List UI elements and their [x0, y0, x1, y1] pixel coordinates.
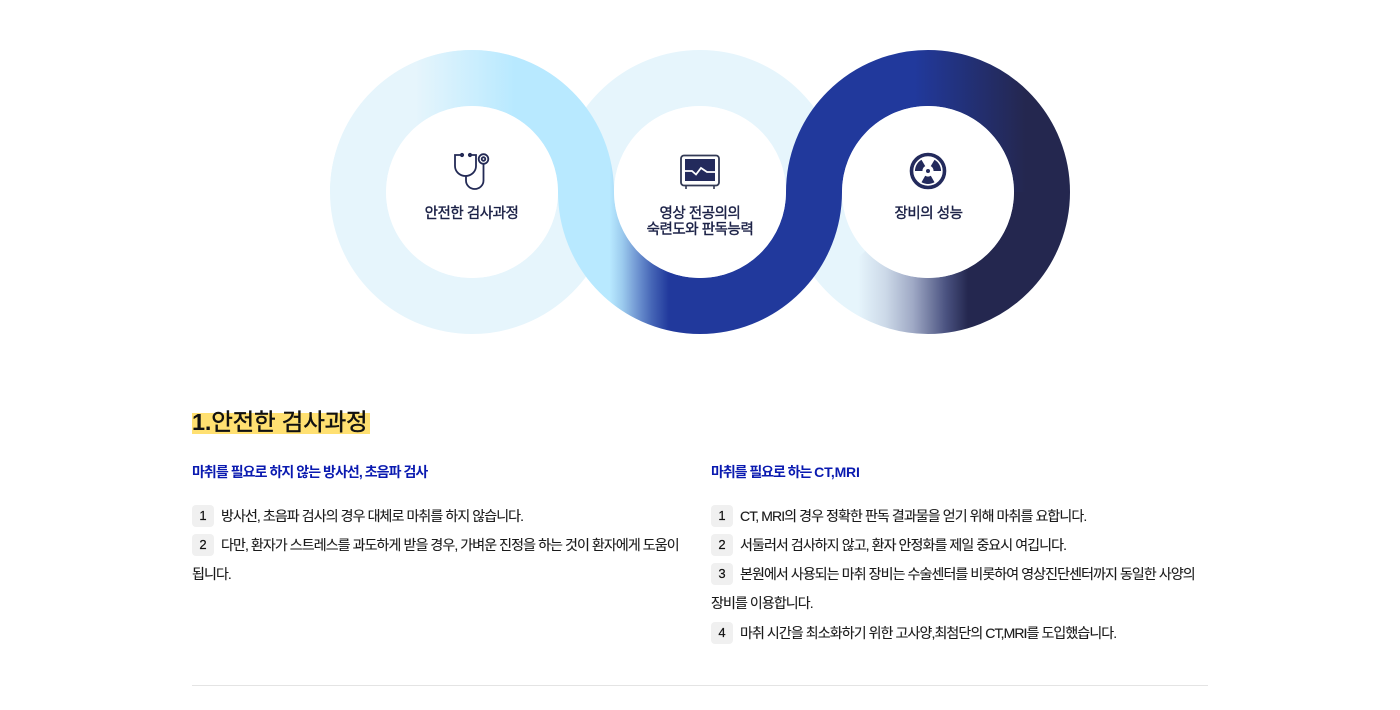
pale base rings [358, 78, 1042, 306]
ring labels: 숙련도와 판독능력 [647, 221, 753, 238]
badge 1 [192, 505, 214, 527]
badge 2: 2 [199, 537, 207, 552]
item 4: 마취 시간을 최소화하기 위한 고사양,최첨단의 CT,MRI를 도입했습니다. [740, 625, 1116, 641]
item 2: 다만, 환자가 스트레스를 과도하게 받을 경우, 가벼운 진정을 하는 것이 환자에게 도움이 [221, 537, 679, 553]
item 1: 방사선, 초음파 검사의 경우 대체로 마취를 하지 않습니다. [221, 508, 523, 524]
icon: stethoscope [455, 154, 488, 189]
ring labels [425, 205, 963, 238]
badge 1 [711, 505, 733, 527]
left list [192, 505, 679, 582]
item 2: 서둘러서 검사하지 않고, 환자 안정화를 제일 중요시 여깁니다. [740, 537, 1066, 553]
badge 2: 2 [718, 537, 726, 552]
right list [711, 505, 1195, 644]
left subheading: 마취를 필요로 하지 않는 방사선, 초음파 검사 [192, 464, 427, 480]
badge 2 [711, 534, 733, 556]
icon: monitor [681, 156, 719, 189]
badge 4: 4 [718, 625, 726, 640]
ring labels: 영상 전공의의 [660, 205, 740, 222]
white centres [386, 106, 1014, 278]
item 1: CT, MRI의 경우 정확한 판독 결과물을 얻기 위해 마취를 요합니다. [740, 508, 1086, 524]
heading highlight [192, 413, 370, 434]
flowing S ribbon [358, 78, 1042, 306]
ring labels: 안전한 검사과정 [425, 205, 518, 222]
badge 3: 3 [718, 566, 726, 581]
badge 3 [711, 563, 733, 585]
ring labels: 장비의 성능 [894, 205, 963, 222]
item 3 continued: 장비를 이용합니다. [711, 595, 813, 611]
icon: radiation [912, 154, 944, 188]
badge 1: 1 [199, 508, 207, 523]
item 3: 본원에서 사용되는 마취 장비는 수술센터를 비롯하여 영상진단센터까지 동일한 사양의 [740, 566, 1195, 582]
end fade arc of right ring [845, 192, 1042, 306]
badge 4 [711, 622, 733, 644]
item 2 continued: 됩니다. [192, 566, 231, 582]
badge 1: 1 [718, 508, 726, 523]
right subheading: 마취를 필요로 하는 CT,MRI [711, 464, 860, 480]
badge 2 [192, 534, 214, 556]
diagram: three linked rings [330, 50, 1070, 334]
heading: 1.안전한 검사과정 [192, 409, 367, 435]
divider [192, 685, 1208, 686]
